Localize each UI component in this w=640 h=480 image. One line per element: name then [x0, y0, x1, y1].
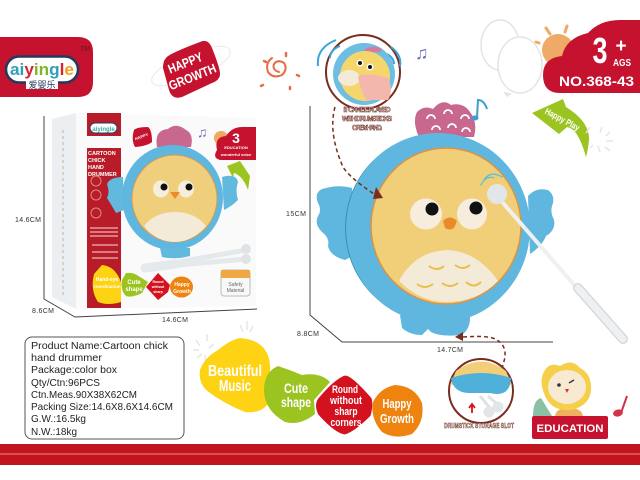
- age badge: +: [615, 36, 627, 57]
- drum face: [371, 148, 521, 304]
- box packaging: wonderful voice: [220, 152, 252, 157]
- drum foot: [400, 315, 470, 336]
- bottom red band: [0, 444, 640, 465]
- box drum: [107, 145, 238, 258]
- feature: round without sharp corners: Round: [332, 384, 358, 396]
- box feature bubbles: Growth: [173, 289, 191, 295]
- storage slot callout: [449, 359, 513, 423]
- product info panel: Ctn.Meas.90X38X62CM: [31, 389, 137, 401]
- box safety tag: Material: [227, 288, 244, 294]
- box packaging: [52, 113, 256, 309]
- belly marks: [417, 265, 481, 287]
- feature: beautiful music: Beautiful: [208, 363, 262, 380]
- age badge: [543, 20, 640, 93]
- box feature bubbles: shape: [125, 287, 143, 293]
- circular callout: play by hand: [318, 35, 400, 109]
- feature: happy growth: [372, 385, 423, 437]
- feature: round without sharp corners: sharp: [334, 406, 358, 418]
- age badge: NO.368-43: [559, 73, 634, 89]
- drum: [317, 100, 554, 336]
- feature: cute shape: Cute: [284, 380, 308, 396]
- drum back rim: [345, 135, 525, 321]
- dimension labels drum: 15CM: [286, 211, 306, 218]
- product info panel: Product Name:Cartoon chick: [31, 340, 169, 352]
- dimension labels drum: 8.8CM: [297, 331, 319, 338]
- box badge: HAPPY: [134, 132, 149, 141]
- happy play arrow: [532, 99, 589, 157]
- feature: round without sharp corners: without: [329, 395, 362, 407]
- icon: red music note: [612, 396, 627, 418]
- box feature bubbles: without: [151, 285, 165, 289]
- happy growth badge: HAPPY: [166, 49, 205, 77]
- feature: round without sharp corners: corners: [330, 417, 362, 429]
- happy growth badge: GROWTH: [166, 61, 218, 93]
- box packaging: 3: [232, 130, 240, 146]
- box feature bubbles: [93, 265, 193, 304]
- icon: spiral sun: [261, 53, 299, 89]
- product info panel: Packing Size:14.6X8.6X14.6CM: [31, 401, 173, 413]
- product info panel: Package:color box: [31, 364, 118, 376]
- box title: CARTOON: [88, 151, 116, 157]
- feature: happy growth: Growth: [380, 411, 414, 426]
- age badge: AGS: [613, 58, 631, 69]
- box feature bubbles: Happy: [174, 282, 190, 288]
- drum ring: [346, 133, 530, 323]
- sparkle: [586, 127, 613, 152]
- sun: [536, 26, 574, 66]
- age badge: 3: [592, 30, 608, 71]
- dimension labels box: 8.6CM: [32, 308, 54, 315]
- lion mascot: [533, 362, 591, 416]
- logo badge: 爱婴乐: [28, 79, 56, 90]
- drum belly: [399, 250, 498, 302]
- education label: [532, 416, 608, 439]
- dimension labels drum: 14.7CM: [437, 347, 463, 354]
- dimension labels drum: [286, 211, 463, 354]
- box title: CHICK: [88, 158, 105, 164]
- dimension lines drum: [310, 106, 553, 342]
- callout caption: OR BY HAND.: [352, 125, 382, 132]
- beak: [443, 218, 457, 230]
- logo badge: TM: [80, 46, 90, 53]
- logo badge: [0, 37, 93, 97]
- sparkles near bubbles: [193, 321, 253, 362]
- mallet: [481, 174, 623, 339]
- logo badge: aiyingle: [10, 60, 74, 79]
- feature: beautiful music: Music: [219, 378, 251, 395]
- box title: [88, 151, 117, 178]
- dashed connector bottom: [455, 332, 505, 368]
- box feature bubbles: coordination: [93, 284, 121, 289]
- dimension labels box: 14.6CM: [162, 317, 188, 324]
- box packaging: aiyingle: [92, 127, 115, 133]
- product info panel: G.W.:16.5kg: [31, 413, 86, 425]
- box safety tag: Safety: [228, 282, 243, 288]
- callout caption: [342, 107, 392, 132]
- box feature bubbles: Cute: [127, 280, 141, 286]
- box safety tag: [221, 270, 250, 296]
- feature: cute shape: shape: [281, 394, 311, 410]
- product info panel: [25, 337, 184, 439]
- dimension labels box: 14.6CM: [15, 217, 41, 224]
- product info panel: hand drummer: [31, 352, 103, 364]
- box badge: [133, 127, 152, 147]
- box packaging: EDUCATION: [224, 145, 248, 150]
- callout caption: IT CAN BE PLAYED: [344, 107, 390, 114]
- education label: EDUCATION: [536, 423, 604, 435]
- feature: happy growth: Happy: [382, 396, 412, 411]
- storage slot caption: DRUMSTICK STORAGE SLOT: [444, 421, 514, 430]
- box mallets: [145, 244, 251, 268]
- feature: round without sharp corners: [316, 375, 373, 435]
- drum crest: [415, 102, 475, 137]
- eyes: [410, 198, 442, 230]
- balloons: [481, 20, 542, 96]
- box title: HAND: [88, 165, 104, 171]
- icon: purple music note: ♫: [415, 43, 428, 63]
- dimension lines box: [44, 116, 257, 317]
- callout caption: WITH DRUMSTICKS: [342, 116, 392, 123]
- feature: beautiful music: [200, 338, 270, 412]
- happy growth badge: [147, 38, 235, 98]
- blue note: [472, 100, 487, 120]
- box title: DRUMMER: [88, 172, 117, 178]
- happy play arrow: Happy Play: [543, 106, 582, 133]
- feature: cute shape: [264, 366, 330, 423]
- box feature bubbles: Hand-eye: [96, 277, 118, 283]
- box feature bubbles: Round: [152, 280, 164, 284]
- dimension labels box: [15, 217, 188, 324]
- product info panel: Qty/Ctn:96PCS: [31, 377, 100, 389]
- box packaging: ♫: [197, 124, 208, 140]
- box feature bubbles: sharp: [153, 290, 163, 294]
- drum wings: [317, 186, 355, 260]
- dashed connector top: [333, 107, 383, 199]
- product info panel: N.W.:18kg: [31, 426, 77, 438]
